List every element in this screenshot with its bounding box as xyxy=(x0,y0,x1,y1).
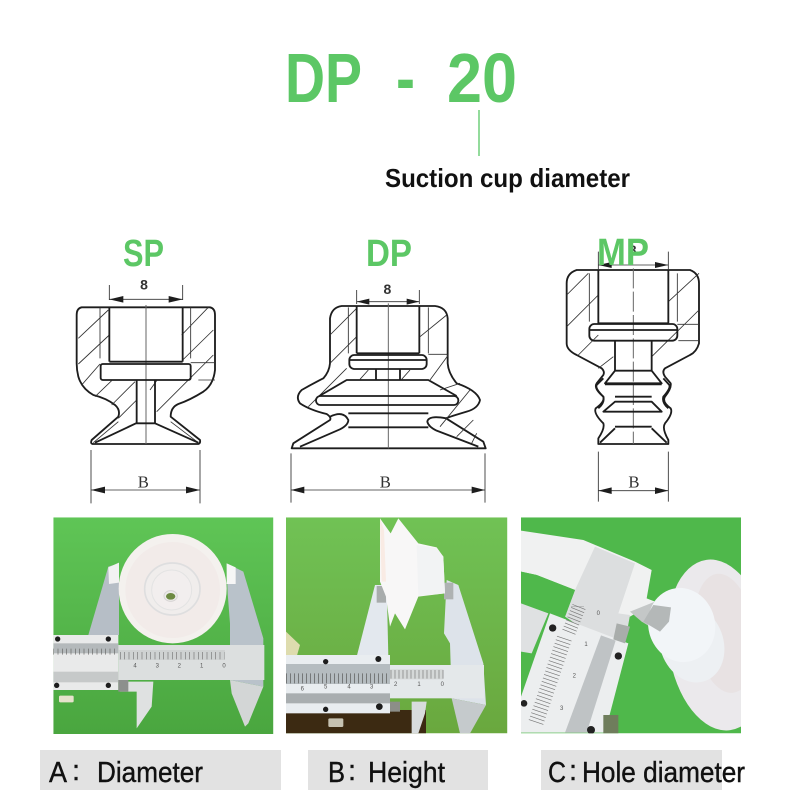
drawing: DP suction cup section xyxy=(291,281,486,503)
caption: suction cup diameter: Suction cup diameter xyxy=(385,163,630,193)
label bar: B height: Height xyxy=(368,757,445,789)
label bar: B height xyxy=(308,750,488,790)
photo: measuring height xyxy=(286,517,507,733)
title: model code DP - 20: DP xyxy=(285,39,362,117)
photo: measuring diameter: 7 xyxy=(66,663,70,669)
drawing: SP suction cup section: B xyxy=(138,472,149,491)
photo: measuring diameter: 2 xyxy=(178,663,182,669)
label bar: A diameter xyxy=(40,750,281,790)
photo: measuring height: 3 xyxy=(370,685,374,691)
label: MP: MP xyxy=(597,232,649,274)
photo: measuring hole diameter: 2 xyxy=(573,674,577,680)
drawing: MP suction cup section: 8 xyxy=(629,242,637,258)
photo: measuring height: 0 xyxy=(441,682,445,688)
label bar: B height: B xyxy=(328,757,345,789)
drawing: MP suction cup section: B xyxy=(628,473,640,492)
photo: measuring height: 4 xyxy=(347,685,351,691)
drawing: MP suction cup section xyxy=(567,242,699,502)
title: model code DP - 20: - xyxy=(396,39,415,117)
label bar: B height: : xyxy=(348,755,356,787)
label bar: A diameter: : xyxy=(72,755,80,787)
photo: measuring height: 5 xyxy=(324,685,328,691)
photo: measuring height: 6 xyxy=(301,687,305,693)
label: SP: SP xyxy=(123,233,164,275)
photo: measuring diameter: 4 xyxy=(133,663,137,669)
pointer line from 20 to caption xyxy=(478,110,480,156)
photo: measuring diameter: 1 xyxy=(200,663,204,669)
label bar: C hole diameter: Hole diameter xyxy=(582,757,745,789)
drawing: DP suction cup section: B xyxy=(380,473,391,492)
photo: measuring diameter: 5 xyxy=(112,663,116,669)
label bar: A diameter: Diameter xyxy=(97,757,203,789)
photo: measuring height: 1 xyxy=(417,682,421,688)
photo: measuring hole diameter: 3 xyxy=(560,706,564,712)
label bar: A diameter: A xyxy=(49,757,68,789)
photo: measuring hole diameter xyxy=(521,517,741,734)
photo: measuring diameter: 3 xyxy=(156,663,160,669)
title: model code DP - 20: 20 xyxy=(447,39,517,117)
photo: measuring hole diameter: 0 xyxy=(597,611,601,617)
label: DP: DP xyxy=(366,233,412,275)
drawing: SP suction cup section: 8 xyxy=(140,276,148,292)
label bar: C hole diameter: : xyxy=(569,755,577,787)
drawing: SP suction cup section xyxy=(77,276,215,503)
label bar: C hole diameter xyxy=(541,750,745,790)
photo: measuring diameter: 0 xyxy=(222,663,226,669)
title: model code DP - 20 xyxy=(285,39,517,117)
label bar: C hole diameter: C xyxy=(548,757,566,789)
drawing: DP suction cup section: 8 xyxy=(383,281,391,297)
photo: measuring diameter: 6 xyxy=(88,663,92,669)
photo: measuring diameter xyxy=(53,517,273,734)
photo: measuring hole diameter: 1 xyxy=(584,642,588,648)
photo: measuring height: 2 xyxy=(394,682,398,688)
